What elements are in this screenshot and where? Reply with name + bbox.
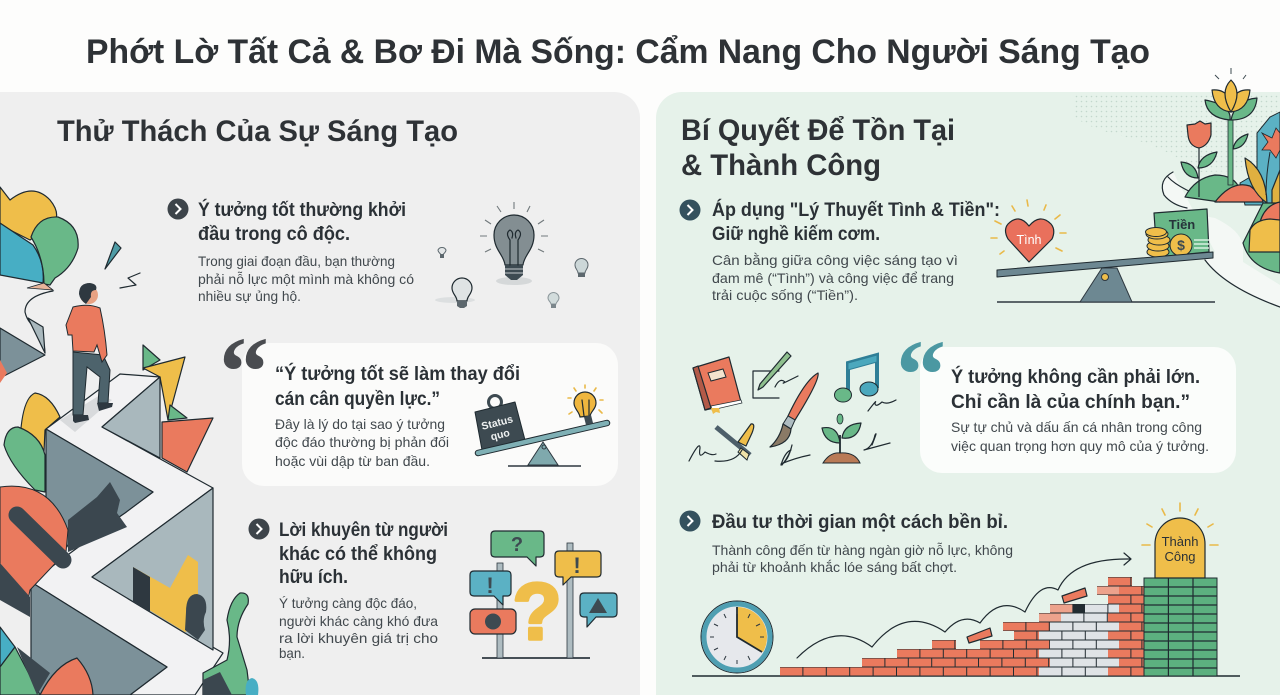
icon: sprout	[822, 414, 890, 463]
icon: conflicting advice signs: ?	[511, 534, 523, 556]
bullet icon	[168, 198, 188, 220]
icon: seesaw love and money: $	[1177, 237, 1185, 253]
bullet icon	[680, 510, 700, 532]
icon: clock	[701, 601, 773, 673]
quote card: be yourself: việc quan trọng hơn quy mô của ý tưởng.	[951, 438, 1209, 454]
icon: seesaw status quo vs idea: Status	[480, 413, 514, 433]
point 3: advice may not help: Ý tưởng càng độc đáo,	[279, 595, 417, 611]
arrow: progress path	[797, 553, 1131, 658]
icon: pen	[753, 352, 798, 398]
point 1: love and money theory: Giữ nghề kiếm cơm.	[712, 224, 880, 245]
point 1: love and money theory: Cân bằng giữa công việc sáng tạo vì	[712, 252, 958, 268]
point 3: invest time: Đầu tư thời gian một cách bền bỉ.	[712, 512, 1008, 533]
point 3: invest time: phải từ khoảnh khắc lóe sáng bất chợt.	[712, 559, 957, 575]
point 3: invest time	[680, 510, 1013, 575]
milestone: Thành Công	[1142, 503, 1218, 578]
green tower	[1144, 578, 1217, 676]
point 1: good ideas start alone	[168, 198, 414, 304]
heading: secrets: & Thành Công	[681, 149, 881, 182]
heading: secrets: Bí Quyết Để Tồn Tại	[681, 114, 955, 147]
point 3: advice may not help: ra lời khuyên giá trị cho	[279, 630, 438, 646]
money: Tiền	[1154, 209, 1209, 257]
heading: challenges: Thử Thách Của Sự Sáng Tạo	[57, 115, 458, 148]
point 3: advice may not help: Lời khuyên từ người	[279, 520, 448, 541]
heading: secrets	[681, 114, 955, 182]
money: Tiền: Tiền	[1169, 217, 1195, 232]
title: Phớt Lờ Tất Cả & Bơ Đi Mà Sống: Cẩm Nang Cho Người Sáng Tạo	[86, 33, 1150, 71]
point 1: good ideas start alone: phải nỗ lực một mình mà không có	[198, 271, 414, 287]
panel: secrets background	[656, 92, 1280, 695]
point 1: love and money theory: Áp dụng "Lý Thuyết Tình & Tiền":	[712, 199, 1000, 221]
point 1: love and money theory	[680, 199, 1000, 303]
point 1: good ideas start alone: đầu trong cô độc.	[198, 224, 350, 245]
point 1: good ideas start alone: Trong giai đoạn đầu, bạn thường	[198, 253, 395, 269]
point 3: advice may not help	[248, 518, 448, 661]
quote card: power balance: độc đáo thường bị phản đối	[275, 434, 449, 450]
point 3: advice may not help: hữu ích.	[279, 567, 348, 588]
quote mark: “	[219, 316, 269, 427]
quote card: be yourself	[896, 319, 1236, 473]
icon: conflicting advice signs: !	[573, 553, 581, 578]
quote card: be yourself: Chỉ cần là của chính bạn.”	[951, 392, 1190, 413]
milestone: Thành Công: Công	[1164, 549, 1196, 564]
heart: Tình: Tình	[1016, 233, 1042, 247]
quote mark: “	[896, 319, 946, 430]
quote card: power balance: “Ý tưởng tốt sẽ làm thay đổi	[275, 363, 520, 385]
icons: creative tools and signatures	[689, 352, 896, 465]
point 3: advice may not help: khác có thể không	[279, 544, 437, 565]
icon: seesaw status quo vs idea	[475, 385, 607, 466]
milestone: Thành Công: Thành	[1162, 534, 1198, 549]
quote card: power balance: hoặc vùi dập từ ban đầu.	[275, 453, 430, 469]
quote card: power balance: Đây là lý do tại sao ý tưởng	[275, 416, 445, 432]
icon: conflicting advice signs: !	[486, 573, 494, 598]
chart: clock and brick staircase to success	[692, 503, 1240, 676]
point 3: advice may not help: người khác càng khó đưa	[279, 613, 438, 629]
icon: book	[693, 357, 742, 414]
point 1: good ideas start alone: nhiều sự ủng hộ.	[198, 288, 301, 304]
icon: music note	[834, 355, 896, 411]
icon: paintbrush	[770, 373, 818, 465]
point 1: good ideas start alone: Ý tưởng tốt thường khởi	[198, 199, 406, 221]
point 1: love and money theory: đam mê (“Tình”) và công việc để trang	[712, 270, 954, 286]
icon: crossed tools	[689, 424, 754, 461]
illustration: garden and path	[1073, 68, 1280, 307]
bullet icon	[248, 518, 270, 540]
heart: Tình	[1006, 219, 1054, 262]
point 3: invest time: Thành công đến từ hàng ngàn giờ nỗ lực, không	[712, 542, 1013, 558]
quote card: power balance: cán cân quyền lực.”	[275, 389, 440, 410]
bricks	[780, 577, 1144, 676]
illustration: maze and man	[0, 187, 258, 695]
quote card: power balance	[219, 316, 618, 486]
panel: challenges background	[0, 92, 640, 695]
quote card: be yourself: Ý tưởng không cần phải lớn.	[951, 366, 1200, 388]
icon: seesaw love and money	[991, 200, 1215, 302]
point 3: advice may not help: bạn.	[279, 645, 305, 661]
bullet icon	[680, 200, 700, 220]
quote card: be yourself: Sự tự chủ và dấu ấn cá nhân trong công	[951, 419, 1202, 435]
point 1: love and money theory: trải cuộc sống (“Tiền”).	[712, 287, 858, 303]
icon: light bulbs	[435, 202, 588, 308]
icon: conflicting advice signs: ?	[513, 567, 561, 656]
icon: conflicting advice signs	[470, 531, 617, 658]
icon: seesaw status quo vs idea: quo	[489, 427, 511, 443]
